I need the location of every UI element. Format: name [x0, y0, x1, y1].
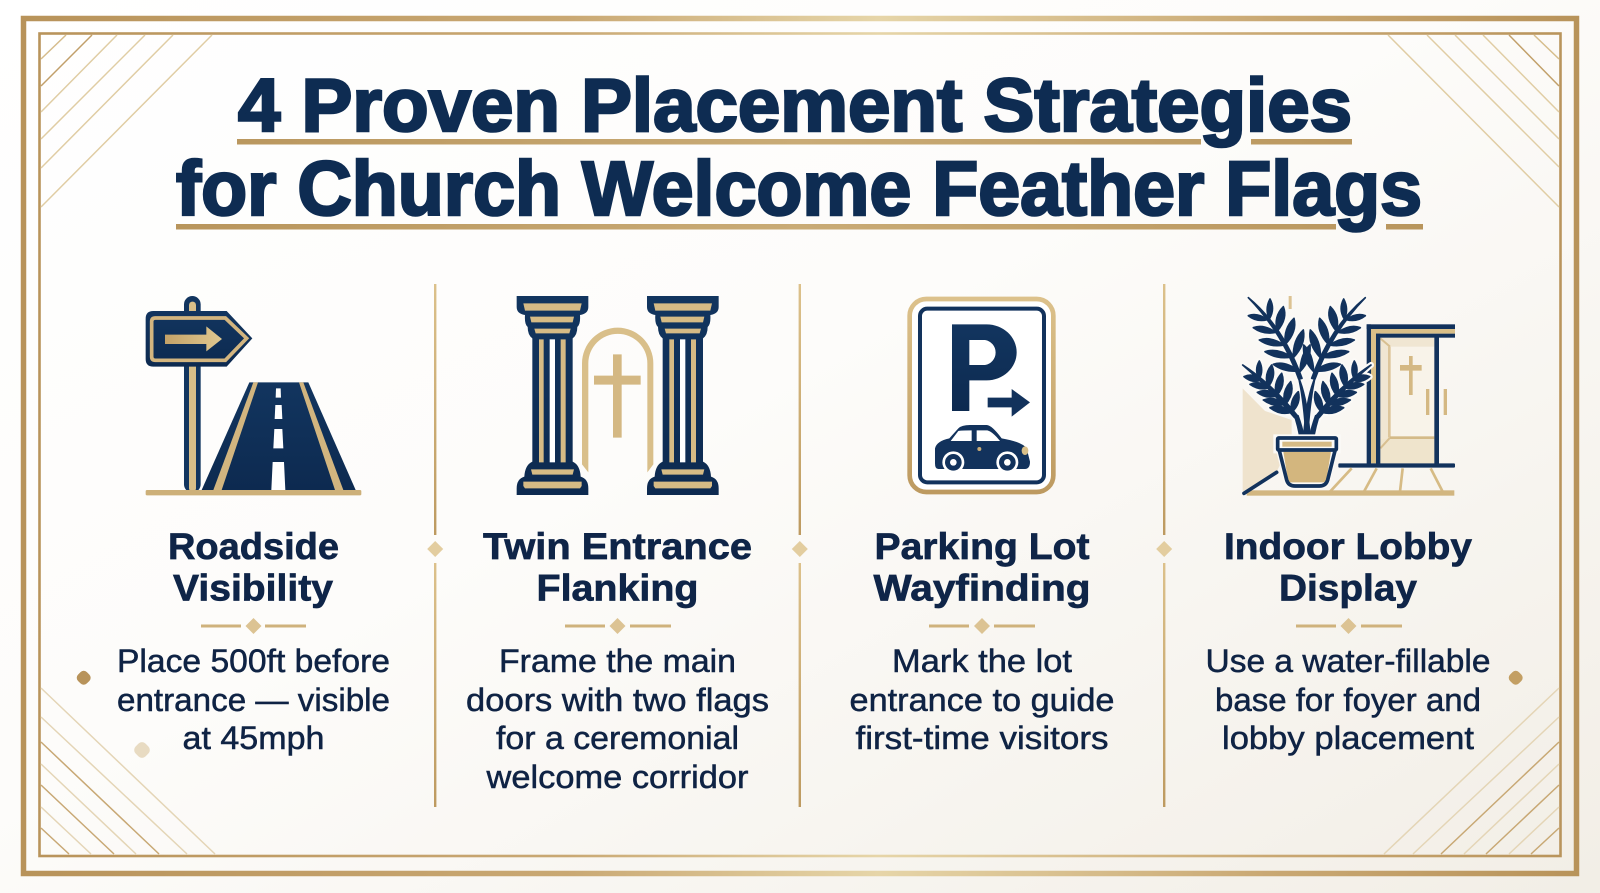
door interior [1380, 337, 1447, 463]
panel: parking lot wayfinding [850, 299, 1114, 756]
door frame [1338, 324, 1455, 468]
floor [1244, 296, 1454, 496]
description: for a ceremonial [496, 720, 739, 756]
wall [1243, 388, 1292, 492]
description: at 45mph [182, 720, 324, 756]
heading: roadside visibility [168, 526, 339, 608]
description: doors with two flags [466, 682, 769, 718]
title: 4 Proven Placement Strategies [238, 63, 1352, 147]
left pillar [517, 296, 588, 495]
arch [582, 328, 653, 472]
ornament rule [565, 618, 671, 634]
panel: twin entrance flanking [466, 296, 769, 795]
description: welcome corridor [485, 759, 749, 795]
plant halo [1243, 298, 1371, 437]
corner lines: top right [1388, 35, 1559, 207]
palm fronds [1243, 298, 1371, 437]
icon: parking sign with arrow and car [910, 299, 1053, 492]
heading: indoor lobby display: Display [1279, 568, 1417, 608]
description: Mark the lot [892, 643, 1072, 679]
column dividers [427, 284, 1172, 807]
icon: twin pillars with arch and cross [517, 296, 719, 495]
title [176, 63, 1422, 232]
ornament rule [201, 618, 306, 634]
corner lines: bottom right [1384, 688, 1559, 854]
description [1206, 643, 1490, 756]
description [850, 643, 1114, 756]
heading: roadside visibility: Roadside [168, 526, 339, 567]
heading: roadside visibility: Visibility [173, 568, 333, 608]
description: entrance — visible [117, 682, 390, 718]
heading: indoor lobby display [1224, 526, 1472, 608]
heading: twin entrance flanking: Twin Entrance [483, 526, 752, 567]
car [935, 425, 1030, 473]
heading: indoor lobby display: Indoor Lobby [1224, 526, 1472, 567]
panel: indoor lobby display [1206, 296, 1490, 756]
icon: road sign and highway [146, 296, 361, 495]
ornament rule [1296, 618, 1402, 634]
cross [594, 354, 641, 438]
heading: parking lot wayfinding [874, 526, 1090, 608]
heading: parking lot wayfinding: Parking Lot [874, 526, 1090, 567]
description [117, 643, 390, 756]
heading: twin entrance flanking: Flanking [536, 568, 698, 608]
heading: parking lot wayfinding: Wayfinding [874, 568, 1090, 608]
right pillar [647, 296, 719, 495]
description: first-time visitors [856, 720, 1108, 756]
description: Use a water-fillable [1206, 643, 1490, 679]
description [466, 643, 769, 795]
description: lobby placement [1222, 720, 1474, 756]
description: entrance to guide [850, 682, 1114, 718]
title underlines [176, 139, 1423, 230]
pot [1273, 434, 1341, 489]
description: Place 500ft before [117, 643, 390, 679]
heading: twin entrance flanking [483, 526, 752, 608]
description: base for foyer and [1215, 682, 1481, 718]
accent dots [75, 669, 1525, 760]
description: Frame the main [499, 643, 736, 679]
corner lines: bottom left [41, 688, 215, 854]
icon: potted palm and lobby door [1243, 296, 1455, 496]
ornament rule [929, 618, 1035, 634]
title: for Church Welcome Feather Flags [176, 146, 1422, 232]
corner lines: top left [41, 35, 212, 207]
panel: roadside visibility [117, 296, 390, 756]
